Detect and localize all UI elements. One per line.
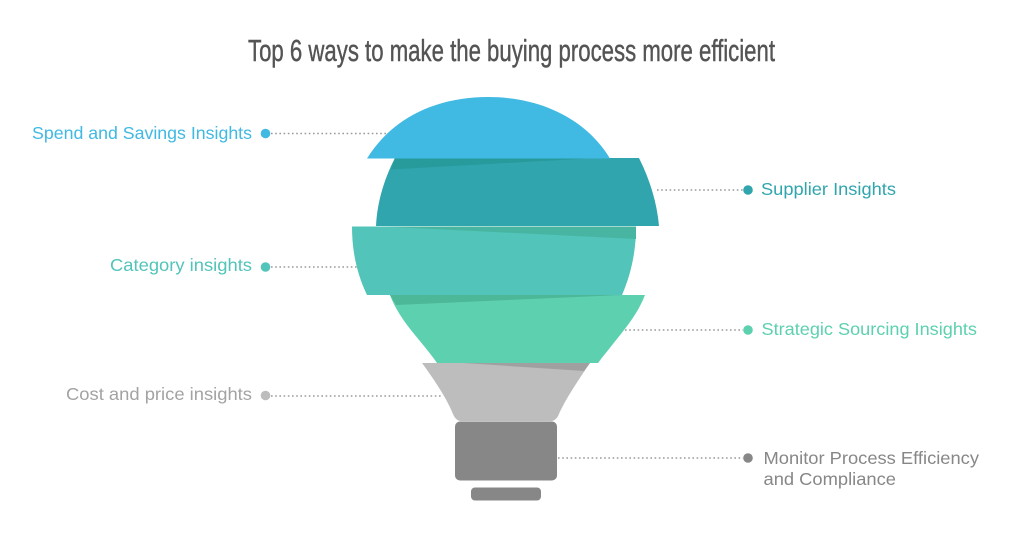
bulb segment: strategic sourcing insights	[390, 295, 645, 363]
callout: cost and price insights: Cost and price insights	[66, 384, 252, 404]
bulb segment: spend and savings insights	[367, 97, 610, 158]
callout: category insights: Category insights	[110, 255, 252, 275]
callout: cost and price insights	[66, 384, 443, 404]
callout: strategic sourcing insights: Strategic Sourcing Insights	[762, 319, 977, 339]
bulb segment: supplier insights	[376, 158, 659, 226]
title: Top 6 ways to make the buying process more efficient	[248, 34, 775, 68]
bulb segment: category insights	[352, 226, 636, 295]
callout: spend and savings insights: Spend and Savings Insights	[32, 123, 252, 143]
callout: strategic sourcing insights	[625, 319, 977, 339]
callout: category insights	[110, 255, 358, 275]
callout: monitor process efficiency and compliance: Monitor Process Efficiency	[764, 448, 979, 468]
bulb base	[455, 422, 557, 480]
callout: monitor process efficiency and compliance: and Compliance	[764, 469, 896, 489]
callout: monitor process efficiency and compliance	[558, 448, 979, 489]
bulb tip	[471, 488, 541, 500]
callout: spend and savings insights	[32, 123, 386, 143]
callout: supplier insights	[657, 179, 896, 199]
bulb segment: cost and price insights	[422, 363, 590, 421]
callout: supplier insights: Supplier Insights	[761, 179, 896, 199]
lightbulb infographic	[352, 97, 659, 500]
